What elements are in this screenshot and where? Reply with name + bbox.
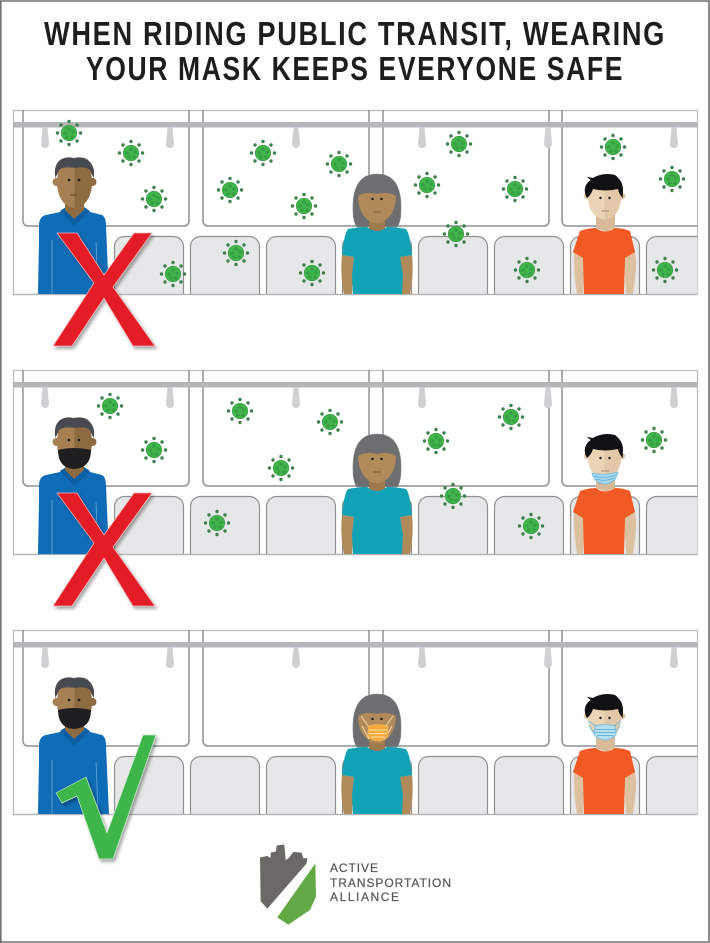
panel: everyone masked, no virus <box>13 630 698 859</box>
logo wordmark: ACTIVE <box>330 861 378 875</box>
icon: city shield <box>260 845 316 925</box>
boy with blue mask <box>573 694 636 814</box>
woman without mask <box>341 434 413 554</box>
red X mark <box>53 233 155 346</box>
logo wordmark: TRANSPORTATION <box>330 876 451 890</box>
woman with orange mask <box>341 694 413 814</box>
bus interior <box>13 370 698 554</box>
logo: Active Transportation Alliance <box>260 845 451 925</box>
man without mask <box>38 157 109 294</box>
bus interior <box>13 630 698 814</box>
boy with mask on chin <box>573 434 636 554</box>
virus particles behind riders <box>97 393 667 539</box>
woman without mask <box>341 174 413 294</box>
red X mark <box>53 493 155 606</box>
title <box>44 15 666 87</box>
logo wordmark: ALLIANCE <box>330 890 399 904</box>
panel: masks worn incorrectly <box>13 370 698 606</box>
panel: no masks, virus spreading <box>13 110 698 346</box>
man with black mask <box>38 417 109 554</box>
logo wordmark <box>330 861 451 904</box>
bus interior <box>13 110 698 294</box>
virus particles behind riders <box>56 120 685 287</box>
man with black mask <box>38 677 109 814</box>
boy without mask <box>573 174 636 294</box>
green check mark <box>56 735 156 859</box>
